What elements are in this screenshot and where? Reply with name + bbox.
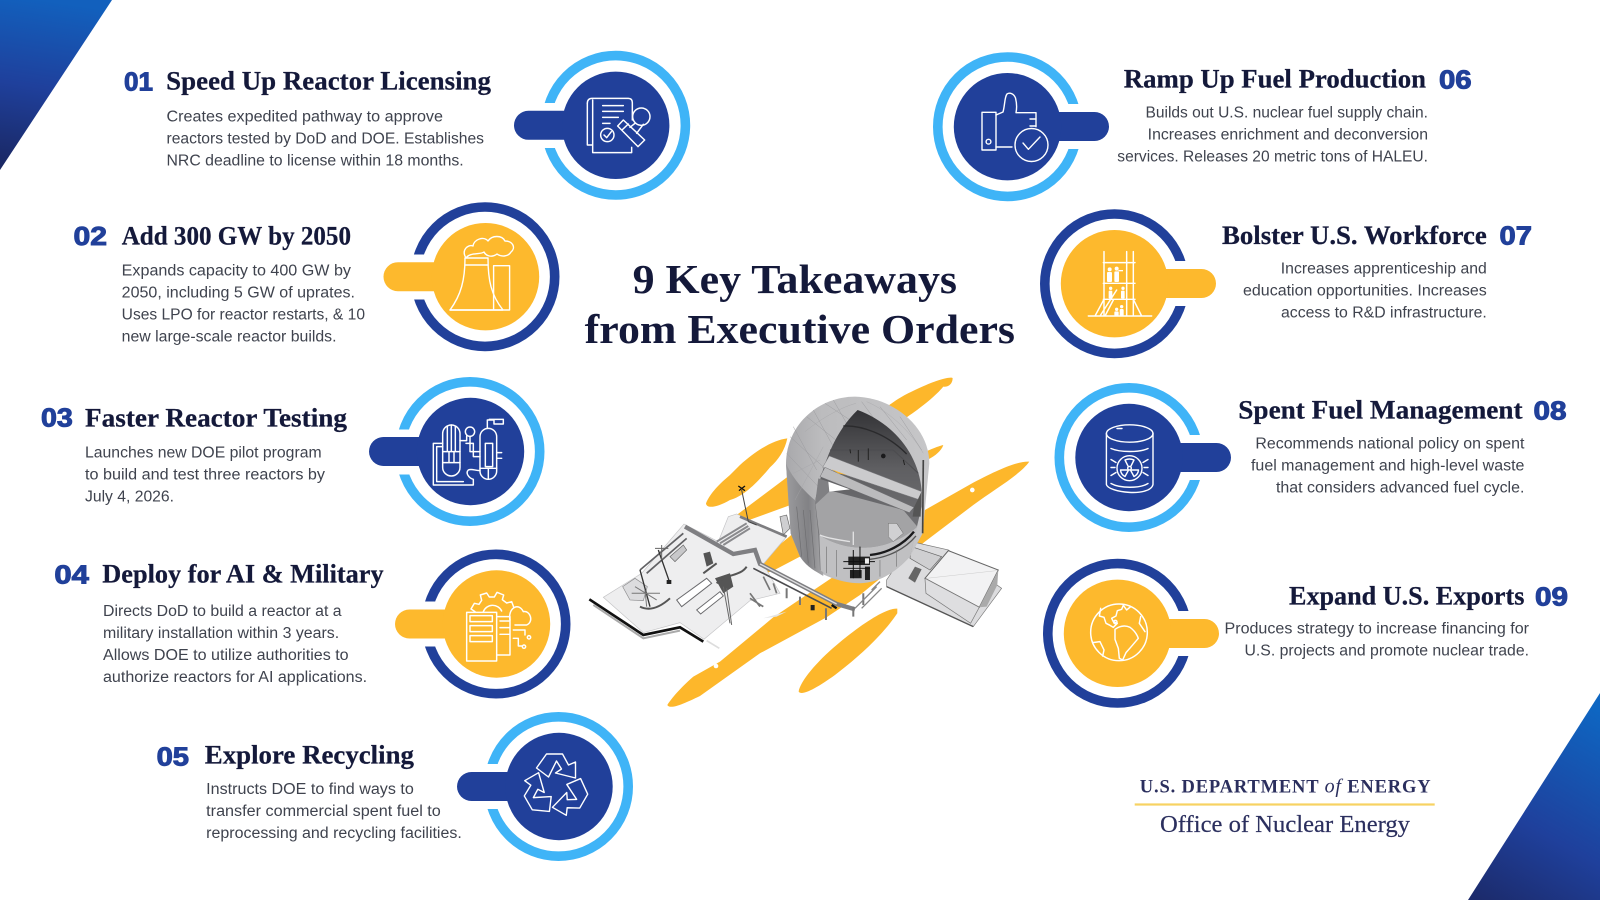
- body text 03: Launches new DOE pilot program: [85, 444, 322, 461]
- badge 09: [1048, 564, 1219, 703]
- heading 04: Deploy for AI & Military: [102, 558, 384, 588]
- interior: [815, 410, 922, 579]
- body text 04: Allows DOE to utilize authorities to: [103, 647, 349, 664]
- crane girders: [823, 456, 922, 499]
- body text 02: 2050, including 5 GW of uprates.: [122, 284, 355, 301]
- panel: 03 faster reactor testing: [41, 382, 540, 521]
- number 01: 01: [124, 67, 153, 97]
- body text 08: fuel management and high-level waste: [1251, 457, 1524, 474]
- body text 01: reactors tested by DoD and DOE. Establishes: [166, 130, 484, 147]
- body text 05: [206, 781, 462, 842]
- badge 05: [457, 717, 628, 856]
- icon: recycling arrows: [518, 754, 593, 819]
- body text 05: reprocessing and recycling facilities.: [206, 825, 462, 842]
- body text 06: Builds out U.S. nuclear fuel supply chain.: [1146, 104, 1428, 121]
- body text 08: that considers advanced fuel cycle.: [1276, 479, 1524, 496]
- badge 03: [369, 382, 540, 521]
- panel: 05 explore recycling: [157, 717, 628, 856]
- brush strokes: [667, 378, 1029, 707]
- body text 06: services. Releases 20 metric tons of HALEU.: [1117, 148, 1428, 165]
- badge 02: [384, 207, 555, 346]
- title: 9 Key Takeaways: [633, 256, 957, 302]
- panel: 09 expand U.S. exports: [1048, 564, 1568, 703]
- number 02: 02: [74, 221, 107, 251]
- body text 07: Increases apprenticeship and: [1281, 260, 1487, 277]
- body text 07: [1243, 260, 1487, 321]
- heading 01: Speed Up Reactor Licensing: [166, 66, 491, 96]
- icon: globe: [1091, 604, 1147, 661]
- body text 02: Uses LPO for reactor restarts, & 10: [122, 306, 365, 323]
- body text 06: Increases enrichment and deconversion: [1148, 126, 1428, 143]
- body text 04: Directs DoD to build a reactor at a: [103, 603, 342, 620]
- body text 09: [1224, 620, 1529, 659]
- body text 08: [1251, 435, 1525, 496]
- body text 09: U.S. projects and promote nuclear trade.: [1244, 642, 1529, 659]
- body text 01: Creates expedited pathway to approve: [166, 108, 443, 125]
- panel: 06 ramp up fuel production: [938, 57, 1472, 196]
- badge 01: [514, 56, 685, 195]
- reactor equipment: [870, 532, 914, 555]
- icon: radioactive barrel: [1106, 425, 1153, 492]
- decorative corner: top left: [0, 0, 112, 170]
- body text 03: to build and test three reactors by: [85, 466, 325, 483]
- body text 07: access to R&D infrastructure.: [1281, 304, 1487, 321]
- icon: cooling tower: [450, 236, 513, 310]
- body text 02: Expands capacity to 400 GW by: [122, 262, 351, 279]
- logo: office of nuclear energy: U.S. DEPARTMENT of ENERGY: [1140, 776, 1431, 798]
- body text 02: [122, 262, 365, 345]
- containment dome: [780, 397, 929, 608]
- panel: 07 bolster U.S. workforce: [1045, 214, 1532, 353]
- heading 07: Bolster U.S. Workforce: [1222, 220, 1487, 250]
- body text 05: Instructs DOE to find ways to: [206, 781, 414, 798]
- panel: 02 add 300 GW by 2050: [74, 207, 555, 346]
- icon: document and stamp: [587, 98, 650, 153]
- body text 06: [1117, 104, 1428, 165]
- badge 08: [1059, 388, 1231, 527]
- icon: reactor system: [433, 419, 503, 485]
- logo: office of nuclear energy: Office of Nuclear Energy: [1160, 811, 1411, 838]
- title: from Executive Orders: [585, 306, 1015, 352]
- heading 05: Explore Recycling: [205, 740, 414, 770]
- mast and supports: [738, 486, 863, 620]
- body text 04: authorize reactors for AI applications.: [103, 669, 367, 686]
- number 04: 04: [54, 559, 90, 589]
- icon: thumbs up with check: [982, 93, 1048, 162]
- body text 04: [103, 603, 367, 686]
- logo: office of nuclear energy: [1135, 776, 1435, 838]
- number 07: 07: [1500, 220, 1532, 250]
- number 03: 03: [41, 403, 73, 433]
- panel: 01 speed up reactor licensing: [124, 56, 685, 195]
- body text 01: [166, 108, 484, 169]
- badge 06: [938, 57, 1109, 196]
- badge 07: [1045, 214, 1216, 353]
- number 05: 05: [157, 741, 189, 771]
- body text 07: education opportunities. Increases: [1243, 282, 1487, 299]
- heading 06: Ramp Up Fuel Production: [1124, 64, 1426, 94]
- panel: 08 spent fuel management: [1059, 388, 1566, 527]
- number 09: 09: [1535, 581, 1568, 611]
- body text 01: NRC deadline to license within 18 months.: [166, 152, 464, 169]
- illustration: reactor with yellow brush strokes: [589, 378, 1029, 707]
- body text 03: [85, 444, 325, 505]
- heading 09: Expand U.S. Exports: [1289, 580, 1524, 610]
- panel: 04 deploy for AI and military: [54, 554, 566, 694]
- decorative corner: bottom right: [1468, 693, 1600, 900]
- number 08: 08: [1534, 395, 1566, 425]
- left plant platform: [589, 486, 863, 648]
- body text 08: Recommends national policy on spent: [1255, 435, 1525, 452]
- heading 03: Faster Reactor Testing: [85, 402, 347, 432]
- body text 03: July 4, 2026.: [85, 488, 174, 505]
- body text 02: new large-scale reactor builds.: [122, 328, 336, 345]
- heading 02: Add 300 GW by 2050: [122, 220, 351, 250]
- body text 09: Produces strategy to increase financing for: [1224, 620, 1529, 637]
- body text 05: transfer commercial spent fuel to: [206, 803, 441, 820]
- title: [585, 256, 1015, 352]
- body text 04: military installation within 3 years.: [103, 625, 339, 642]
- icon: servers, gear and cloud: [467, 592, 531, 661]
- icon: scaffold workers: [1088, 252, 1152, 316]
- badge 04: [395, 554, 566, 694]
- right building: [887, 542, 1002, 627]
- number 06: 06: [1439, 64, 1472, 94]
- heading 08: Spent Fuel Management: [1238, 394, 1523, 424]
- pillar and white window: [815, 478, 829, 505]
